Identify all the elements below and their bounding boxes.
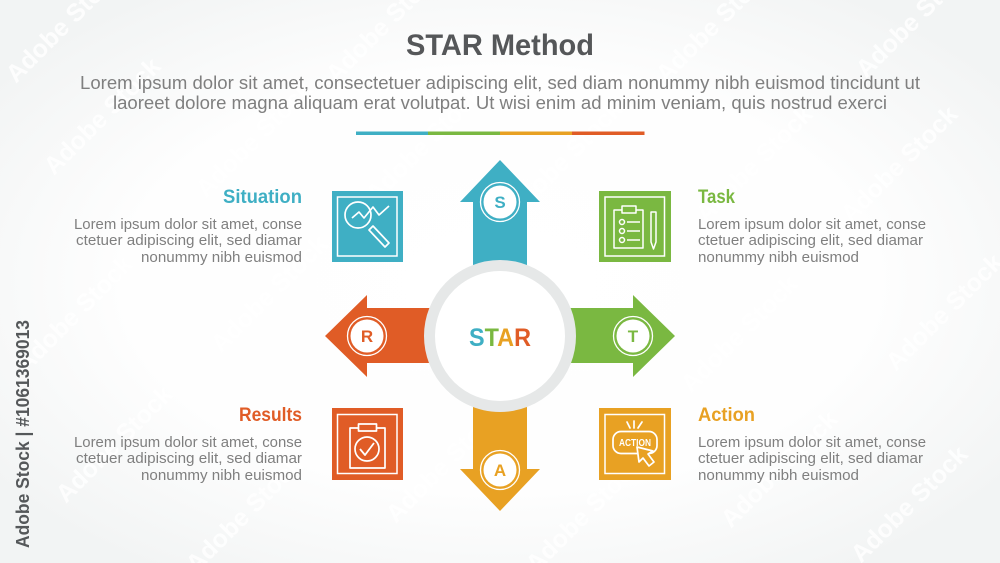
text block: Action: [698, 405, 926, 484]
icon: clipboard with check (Results): [332, 408, 403, 480]
text block: Task: nonummy nibh euismod: [698, 249, 859, 266]
arrow: R left: R: [361, 327, 373, 346]
text block: Situation: Lorem ipsum dolor sit amet, conse: [74, 216, 302, 233]
text: Adobe Stock: [500, 95, 628, 223]
icon: clipboard checklist and pencil (Task): [599, 191, 671, 262]
text: Adobe Stock: [380, 400, 508, 528]
arrow: T right: [540, 295, 675, 377]
text: Adobe Stock: [50, 380, 178, 508]
intro text block: Lorem ipsum dolor sit amet, consectetuer adipiscing elit, sed diam nonummy nibh euismod tincidunt ut: [80, 73, 920, 93]
icon: action button with cursor (Action): ACTION: [619, 438, 651, 449]
centre circle with STAR label: [430, 266, 570, 406]
centre circle with STAR label: STAR: [469, 324, 531, 352]
text block: Action: Lorem ipsum dolor sit amet, conse: [698, 434, 926, 451]
text block: Results: ctetuer adipiscing elit, sed diamar: [76, 450, 302, 467]
text: Adobe Stock: [10, 250, 138, 378]
text: Adobe Stock: [205, 230, 333, 358]
text: Adobe Stock: [675, 270, 803, 398]
text block: Situation: [74, 187, 302, 266]
arrow: T right: T: [628, 327, 639, 346]
text block: Results: Results: [239, 405, 302, 426]
text block: Task: ctetuer adipiscing elit, sed diamar: [698, 232, 923, 249]
intro text block: laoreet dolore magna aliquam erat volutpat. Ut wisi enim ad minim veniam, quis nostrud exerci: [113, 93, 887, 113]
title: STAR Method: [406, 29, 594, 62]
arrow: S up: [460, 160, 540, 300]
text block: Task: Lorem ipsum dolor sit amet, conse: [698, 216, 926, 233]
text: Adobe Stock: [360, 80, 488, 208]
text block: Task: Task: [698, 187, 735, 208]
stock id vertical label: Adobe Stock | #1061369013: [13, 320, 33, 548]
arrow: R left: [325, 295, 460, 377]
text block: Action: ctetuer adipiscing elit, sed diamar: [698, 450, 923, 467]
arrow: S up: S: [494, 193, 506, 212]
text block: Results: [74, 405, 302, 484]
text block: Action: nonummy nibh euismod: [698, 467, 859, 484]
text block: Situation: ctetuer adipiscing elit, sed diamar: [76, 232, 302, 249]
text: Adobe Stock: [38, 52, 166, 180]
text block: Task: [698, 187, 926, 266]
icon: action button with cursor (Action): [599, 408, 671, 480]
text: Adobe Stock: [190, 75, 318, 203]
icon: magnifier over chart (Situation): [332, 191, 403, 262]
arrow: A down: [460, 380, 540, 511]
text block: Situation: Situation: [223, 187, 302, 208]
intro text block: [80, 73, 920, 113]
text: Adobe Stock: [835, 100, 963, 228]
arrow: A down: A: [494, 461, 506, 480]
text: Adobe Stock: [690, 100, 818, 228]
text block: Results: nonummy nibh euismod: [141, 467, 302, 484]
text block: Situation: nonummy nibh euismod: [141, 249, 302, 266]
text block: Action: Action: [698, 405, 755, 426]
text: Adobe Stock: [715, 405, 843, 533]
text block: Results: Lorem ipsum dolor sit amet, conse: [74, 434, 302, 451]
four-colour title underline: [356, 132, 644, 135]
